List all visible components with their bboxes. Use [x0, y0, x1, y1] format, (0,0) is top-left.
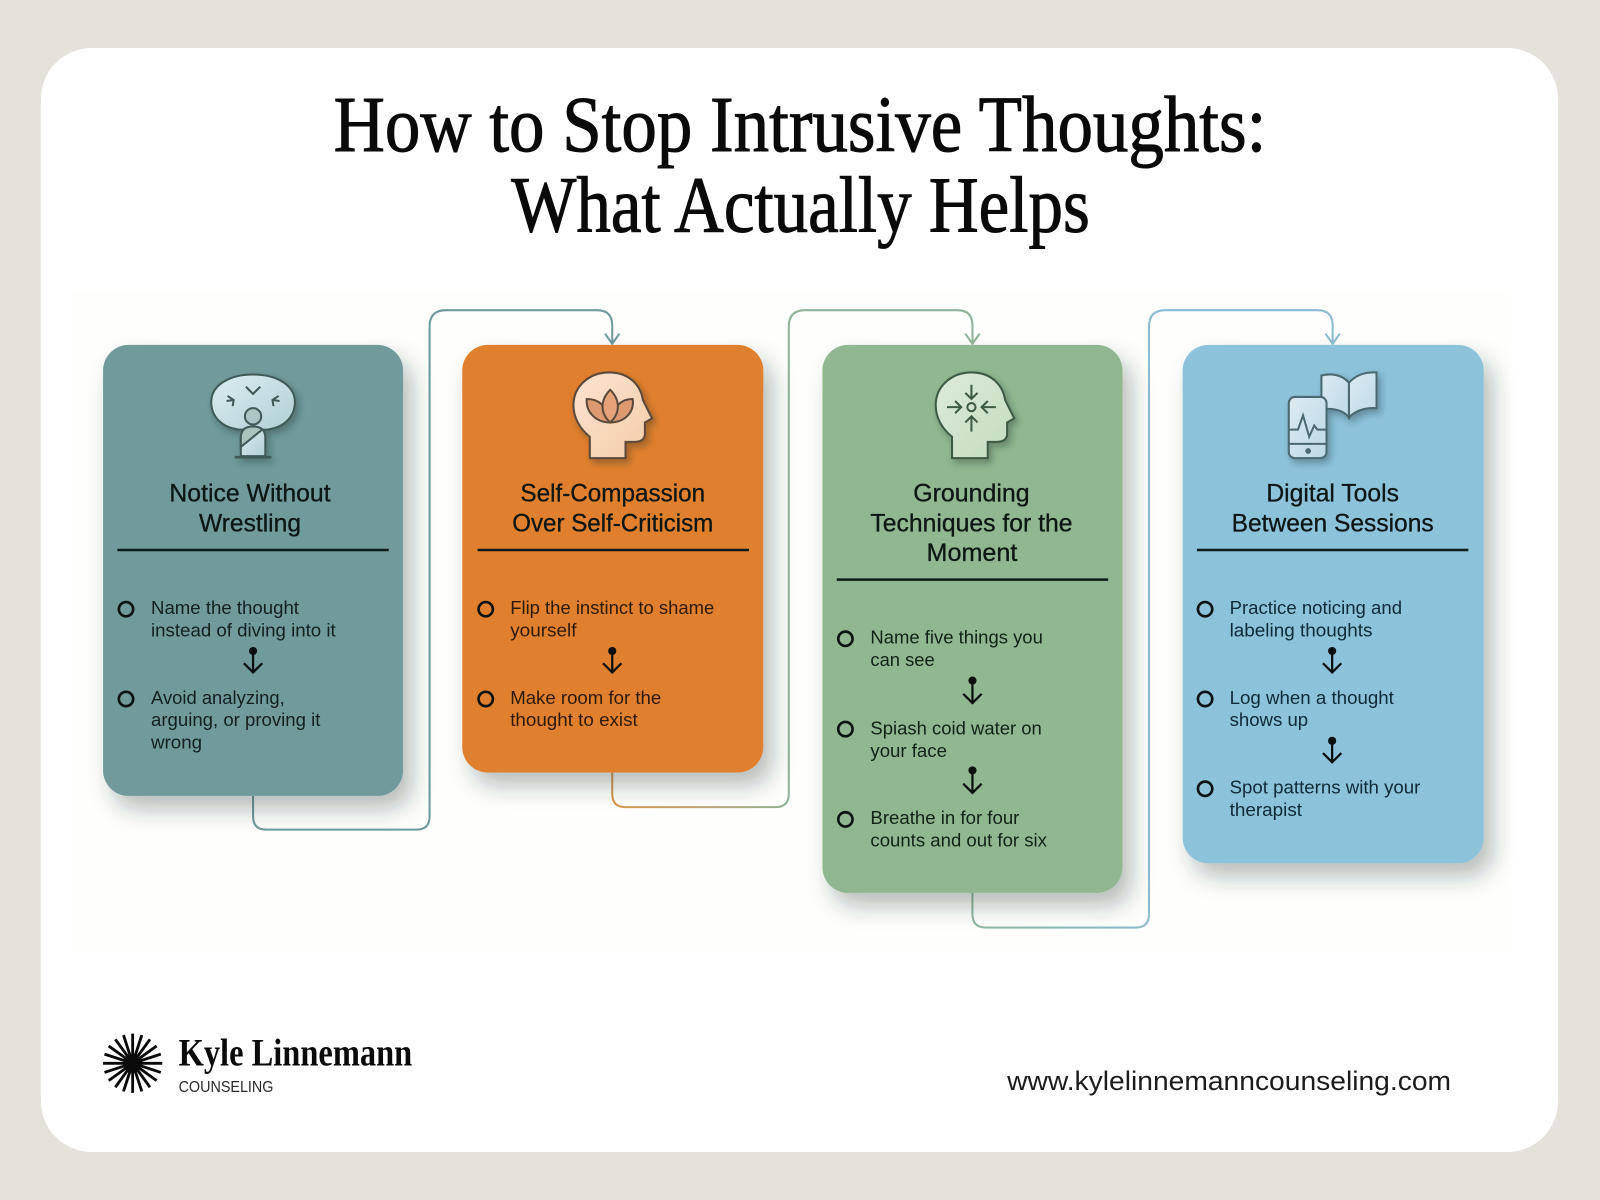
panel: Grounding Techniques for the Moment [822, 345, 1122, 893]
bullet: breathe: counts and out for six [870, 830, 1048, 851]
panel: Digital Tools Between Sessions [1183, 345, 1484, 863]
icon: phone and book [1289, 372, 1377, 458]
bullet: spot patterns [1198, 777, 1420, 820]
website url: www.kylelinnemanncounseling.com [1006, 1066, 1451, 1096]
card background [822, 345, 1122, 893]
icon: down arrow [603, 647, 621, 672]
wordmark: Kyle Linnemann [179, 1031, 412, 1074]
heading: Self-Compassion [520, 480, 705, 508]
icon: down arrow [963, 766, 982, 793]
bullet: flip the instinct: Flip the instinct to shame [510, 597, 714, 618]
heading: Techniques for the [870, 509, 1072, 537]
panel: Notice Without Wrestling [103, 345, 403, 796]
card background [103, 345, 403, 796]
heading: Wrestling [199, 509, 301, 537]
icon: down arrow [1323, 737, 1341, 762]
icon: down arrow [1323, 647, 1341, 672]
heading: Moment [927, 539, 1017, 567]
bullet: name the thought [119, 597, 336, 640]
bullet: name five things: Name five things you [870, 627, 1043, 648]
title: What Actually Helps [511, 162, 1090, 250]
bullet: log when: Log when a thought [1230, 687, 1395, 708]
bullet: splash cold water: Spiash coid water on [870, 717, 1042, 738]
icon: person under thought bubble [211, 374, 295, 457]
bullet: make room [479, 687, 661, 730]
logo: Kyle Linnemann Counseling [103, 1031, 412, 1096]
heading [870, 480, 1072, 567]
icon: head with lotus [573, 372, 652, 458]
bullet: avoid analyzing: Avoid analyzing, [151, 687, 285, 708]
icon: down arrow [963, 677, 982, 703]
bullet: flip the instinct: yourself [510, 619, 577, 640]
bullet: log when [1198, 687, 1395, 730]
bullet: flip the instinct [479, 597, 714, 640]
bullet: make room: thought to exist [510, 709, 638, 730]
bullet: practice noticing [1198, 597, 1402, 640]
panel: Self-Compassion Over Self-Criticism [462, 345, 763, 772]
heading [1232, 480, 1434, 537]
heading: Digital Tools [1266, 480, 1399, 508]
arrow: card 2 to card 3 [612, 310, 980, 807]
heading [512, 480, 713, 537]
bullet: spot patterns: therapist [1230, 799, 1303, 820]
bullet: name five things [838, 627, 1043, 670]
heading: Grounding [913, 480, 1030, 508]
heading: Notice Without [169, 480, 331, 508]
bullet: avoid analyzing [119, 687, 321, 753]
bullet: make room: Make room for the [510, 687, 661, 708]
bullet: practice noticing: Practice noticing and [1230, 597, 1402, 618]
title: How to Stop Intrusive Thoughts: [334, 81, 1266, 169]
icon: sunburst [103, 1034, 162, 1093]
card background [462, 345, 763, 772]
bullet: practice noticing: labeling thoughts [1230, 619, 1372, 640]
heading: Between Sessions [1232, 509, 1434, 537]
bullet: name five things: can see [870, 649, 935, 670]
bullet: splash cold water [838, 717, 1042, 761]
bullet: splash cold water: your face [870, 740, 947, 761]
card background [1183, 345, 1484, 863]
faint chart backdrop [71, 291, 1510, 954]
bullet: avoid analyzing: wrong [150, 732, 202, 753]
bullet: log when: shows up [1230, 709, 1308, 730]
bullet: name the thought: instead of diving into it [151, 619, 336, 640]
icon: head with converging arrows [936, 372, 1014, 458]
arrow: card 3 to card 4 [972, 310, 1340, 928]
icon: down arrow [244, 647, 262, 672]
heading: Over Self-Criticism [512, 509, 713, 537]
heading [169, 480, 331, 537]
sub wordmark: COUNSELING [179, 1079, 273, 1096]
title [334, 81, 1266, 250]
bullet: avoid analyzing: arguing, or proving it [151, 709, 321, 730]
bullet: breathe [838, 807, 1048, 851]
bullet: name the thought: Name the thought [151, 597, 300, 618]
bullet: breathe: Breathe in for four [870, 807, 1019, 828]
bullet: spot patterns: Spot patterns with your [1230, 777, 1420, 798]
arrow: card 1 to card 2 [253, 310, 619, 830]
